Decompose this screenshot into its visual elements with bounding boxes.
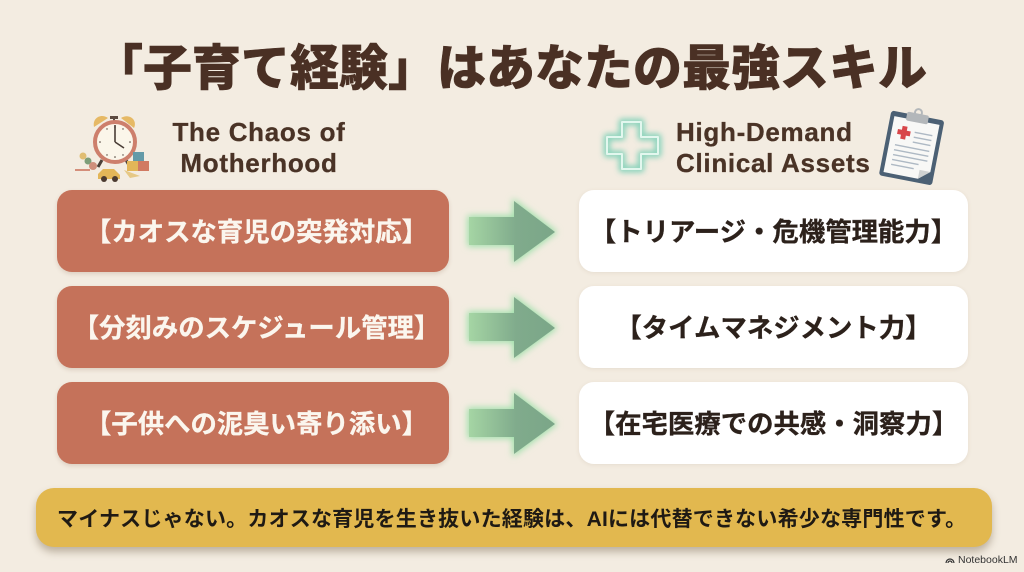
title: 「子育て経験」はあなたの最強スキル — [94, 42, 927, 96]
callout: summary bar: マイナスじゃない。カオスな育児を生き抜いた経験は、AIには代替できない希少な専門性です。 — [57, 508, 966, 531]
panel: chaos item 3: 【子供への泥臭い寄り添い】 — [85, 409, 428, 439]
heading: high-demand clinical assets — [676, 117, 871, 178]
icon: alarm clock and toys — [75, 116, 149, 182]
panel: chaos item 1: 【カオスな育児の突発対応】 — [85, 217, 428, 247]
icon: notebooklm mark — [945, 558, 955, 563]
panel: chaos item 2 — [57, 286, 449, 368]
panel: clinical asset 2: 【タイムマネジメント力】 — [615, 313, 932, 343]
arrow 3 — [463, 388, 560, 458]
heading: the chaos of motherhood — [172, 117, 346, 178]
arrow 1 — [463, 196, 560, 266]
panel: clinical asset 3 — [579, 382, 968, 464]
callout: summary bar — [36, 488, 992, 547]
panel: clinical asset 1 — [579, 190, 968, 272]
heading: the chaos of motherhood: The Chaos of — [172, 117, 346, 147]
panel: clinical asset 3: 【在宅医療での共感・洞察力】 — [589, 409, 958, 439]
heading: high-demand clinical assets: Clinical Assets — [676, 148, 871, 178]
panel: chaos item 1 — [57, 190, 449, 272]
icon: clipboard — [879, 108, 944, 185]
heading: high-demand clinical assets: High-Demand — [676, 117, 853, 147]
watermark text: NotebookLM — [958, 554, 1018, 566]
panel: clinical asset 1: 【トリアージ・危機管理能力】 — [590, 217, 957, 247]
panel: clinical asset 2 — [579, 286, 968, 368]
icon: glowing medical cross — [600, 114, 666, 176]
panel: chaos item 2: 【分刻みのスケジュール管理】 — [73, 313, 440, 343]
arrow 2 — [463, 292, 560, 362]
heading: the chaos of motherhood: Motherhood — [180, 148, 338, 178]
panel: chaos item 3 — [57, 382, 449, 464]
